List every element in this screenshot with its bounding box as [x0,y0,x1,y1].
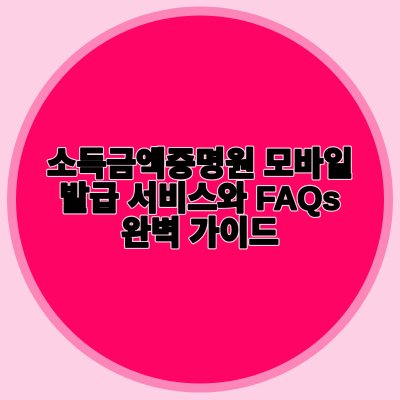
title: 소득금액증명원 모바일 [47,146,353,182]
title [47,146,353,251]
title: 소득금액증명원 모바일 [47,146,353,182]
title: 발급 서비스와 FAQs [60,180,340,216]
title: 발급 서비스와 FAQs [60,180,340,216]
title: 완벽 가이드 [121,215,279,251]
title: 완벽 가이드 [121,215,279,251]
